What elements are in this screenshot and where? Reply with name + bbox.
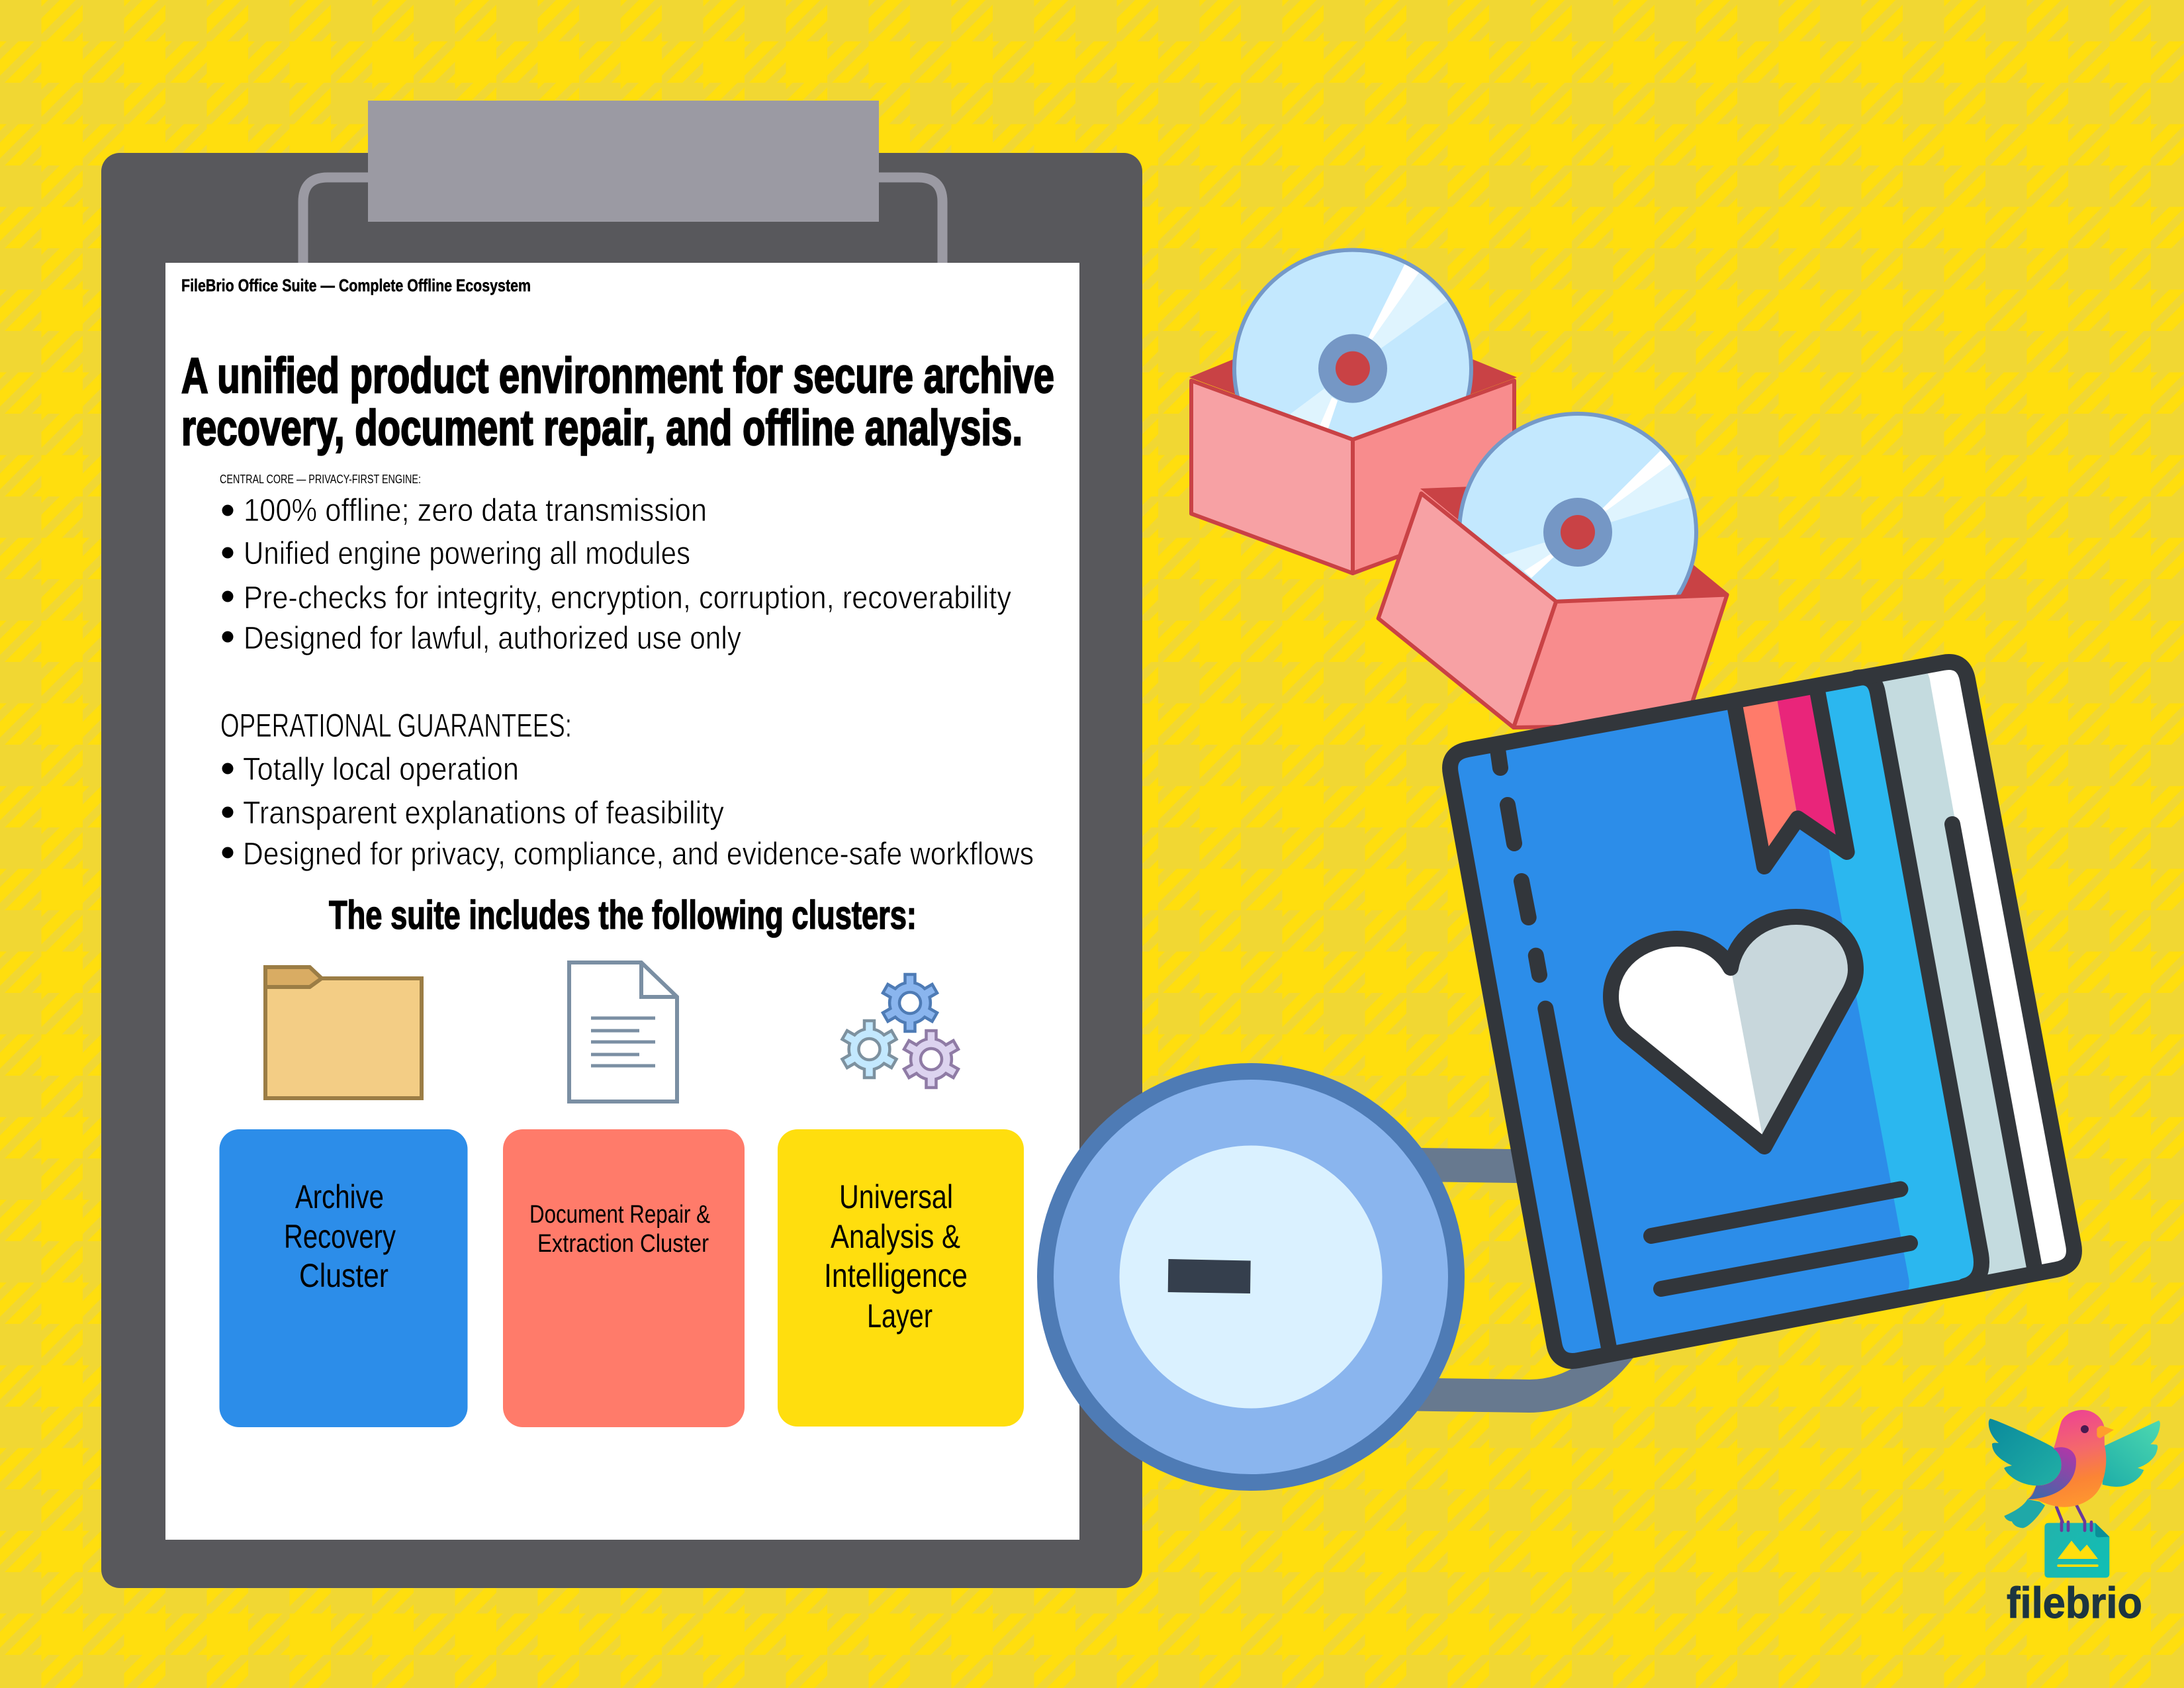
clipboard wire clip [303, 177, 942, 265]
text block: operational guarantees: Designed for privacy, compliance, and evidence-safe workflows [243, 837, 1034, 872]
text block: central core [220, 473, 1011, 656]
text block: central core: CENTRAL CORE — PRIVACY-FIRST ENGINE: [220, 473, 421, 486]
main title: A unified product environment for secure archive [181, 348, 1054, 403]
card: document repair and extraction cluster: Document Repair & [529, 1201, 710, 1229]
icon: folder [265, 967, 422, 1098]
text block: operational guarantees [220, 707, 1034, 872]
clusters heading: The suite includes the following clusters: [329, 893, 917, 937]
card: archive recovery cluster: Recovery [284, 1218, 396, 1255]
text block: central core: 100% offline; zero data transmission [244, 493, 707, 528]
card: archive recovery cluster: Archive [295, 1178, 384, 1215]
card: universal analysis and intelligence layer: Universal [839, 1178, 953, 1215]
main title: recovery, document repair, and offline analysis. [181, 400, 1023, 455]
card: document repair and extraction cluster [503, 1129, 745, 1427]
panel: clipboard [101, 101, 1142, 1588]
small header text: FileBrio Office Suite — Complete Offline Ecosystem [181, 275, 531, 295]
clipboard clamp bar [368, 101, 879, 222]
text block: central core: Designed for lawful, authorized use only [244, 621, 741, 656]
icon: magnifier with minus [1037, 1063, 1465, 1491]
magnifier handle [1390, 1164, 1635, 1396]
icon: document [569, 962, 677, 1102]
text block: central core: Unified engine powering all modules [244, 536, 690, 571]
logo: filebrio bird [1989, 1410, 2160, 1627]
text block: operational guarantees: Totally local operation [243, 752, 519, 787]
heart on book cover [1611, 917, 1856, 1147]
card: universal analysis and intelligence layer: Intelligence [824, 1257, 968, 1294]
logo wordmark: filebrio [2007, 1578, 2142, 1627]
card: universal analysis and intelligence layer [778, 1129, 1024, 1427]
card: universal analysis and intelligence layer: Analysis & [831, 1218, 960, 1255]
icon: blue book with heart [1450, 662, 2074, 1361]
icon: disc in open box, front [1379, 414, 1728, 727]
main title [181, 348, 1054, 455]
text block: operational guarantees: OPERATIONAL GUARANTEES: [220, 707, 572, 744]
text block: central core: Pre-checks for integrity, encryption, corruption, recoverability [244, 581, 1011, 616]
paper sheet [165, 263, 1079, 1540]
card: archive recovery cluster [220, 1129, 467, 1427]
card: universal analysis and intelligence layer: Layer [867, 1297, 933, 1335]
icon: gears [842, 974, 958, 1088]
card: document repair and extraction cluster: Extraction Cluster [537, 1230, 709, 1258]
icon: disc in open box, back [1189, 250, 1517, 573]
card: archive recovery cluster: Cluster [299, 1257, 388, 1294]
text block: operational guarantees: Transparent explanations of feasibility [243, 796, 724, 831]
